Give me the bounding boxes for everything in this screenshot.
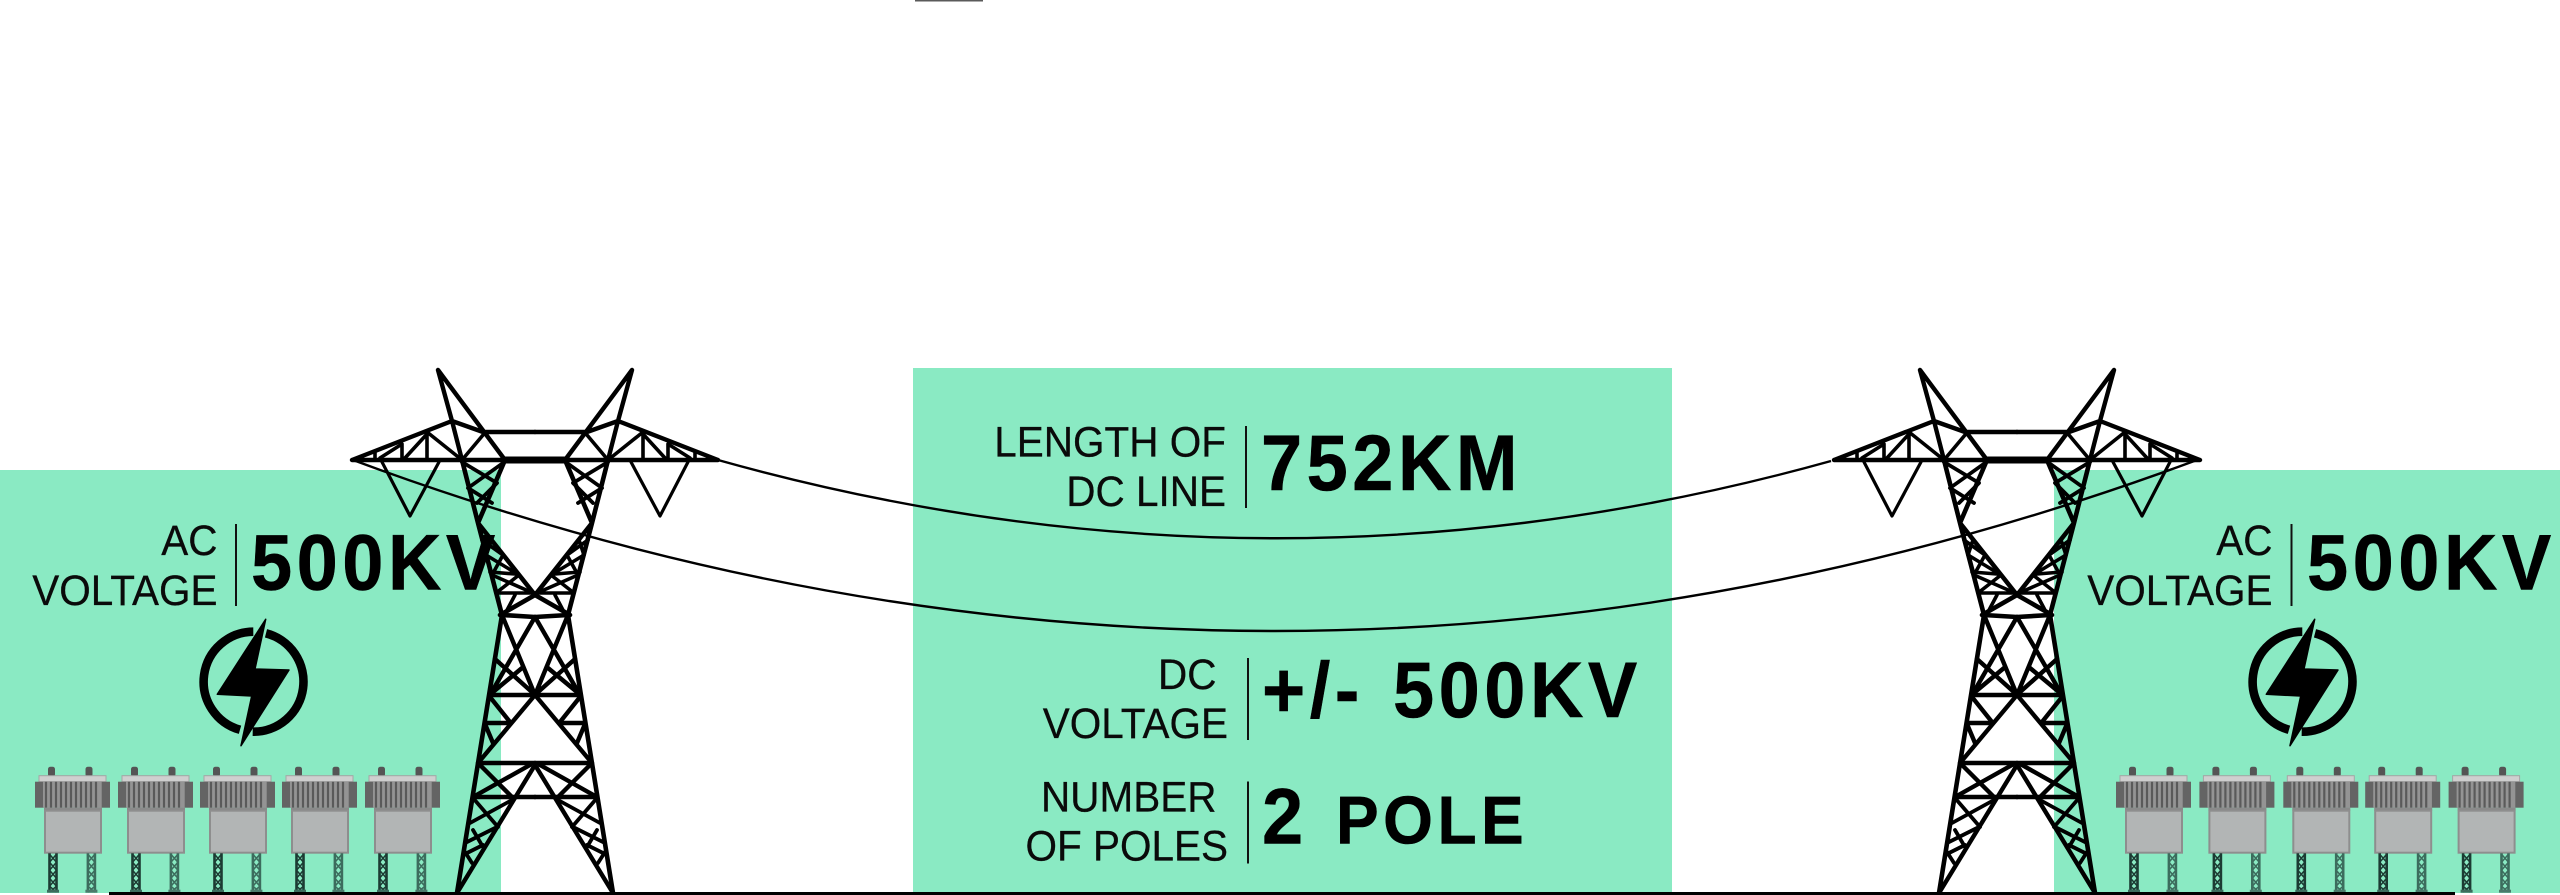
transformer 3	[2283, 767, 2358, 893]
transformer 5	[2449, 767, 2524, 893]
left AC voltage stat	[32, 516, 500, 614]
upper DC cable	[718, 460, 1831, 538]
divider	[2290, 524, 2292, 606]
AC voltage label: AC	[2216, 516, 2272, 564]
line length label: DC LINE	[1066, 467, 1226, 515]
left transformer row	[35, 767, 440, 893]
transformer 2	[118, 767, 193, 893]
poles value: POLE	[1336, 782, 1528, 858]
transformer 2	[2199, 767, 2274, 893]
right AC voltage stat	[2087, 516, 2556, 614]
divider	[1247, 658, 1249, 740]
left transmission tower	[352, 370, 718, 893]
transformer 4	[282, 767, 357, 893]
icon: right lightning bolt	[2253, 619, 2352, 746]
DC voltage value: 500KV	[1393, 647, 1642, 734]
panel: centre DC line background	[913, 368, 1672, 895]
icon: left lightning bolt	[204, 619, 303, 746]
divider	[235, 524, 237, 606]
DC voltage value: +/-	[1262, 647, 1364, 734]
right transmission tower	[1834, 370, 2200, 893]
transformer 1	[2116, 767, 2191, 893]
divider	[1247, 782, 1249, 864]
transformer 5	[365, 767, 440, 893]
poles label: NUMBER	[1041, 773, 1216, 821]
AC voltage value: 500KV	[2307, 520, 2556, 607]
DC voltage stat	[1043, 647, 1642, 747]
divider	[1245, 426, 1247, 508]
line length label: LENGTH OF	[994, 418, 1226, 466]
DC voltage label: VOLTAGE	[1043, 699, 1228, 747]
panel: right AC station background	[2054, 470, 2560, 893]
poles label: OF POLES	[1025, 822, 1228, 870]
poles value: 2	[1262, 774, 1308, 861]
AC voltage value: 500KV	[251, 520, 500, 607]
number of poles stat	[1025, 773, 1528, 870]
top edge mark	[915, 0, 983, 2]
line length value: 752KM	[1261, 420, 1522, 507]
lower DC cable	[353, 460, 2197, 631]
panel: left AC station background	[0, 470, 501, 893]
transformer 4	[2365, 767, 2440, 893]
DC line length stat	[994, 418, 1522, 515]
AC voltage label: VOLTAGE	[32, 566, 218, 614]
AC voltage label: AC	[161, 516, 218, 564]
right transformer row	[2116, 767, 2524, 893]
AC voltage label: VOLTAGE	[2087, 566, 2272, 614]
ground line	[109, 892, 2455, 895]
DC voltage label: DC	[1158, 650, 1216, 698]
transformer 3	[200, 767, 275, 893]
transformer 1	[35, 767, 110, 893]
